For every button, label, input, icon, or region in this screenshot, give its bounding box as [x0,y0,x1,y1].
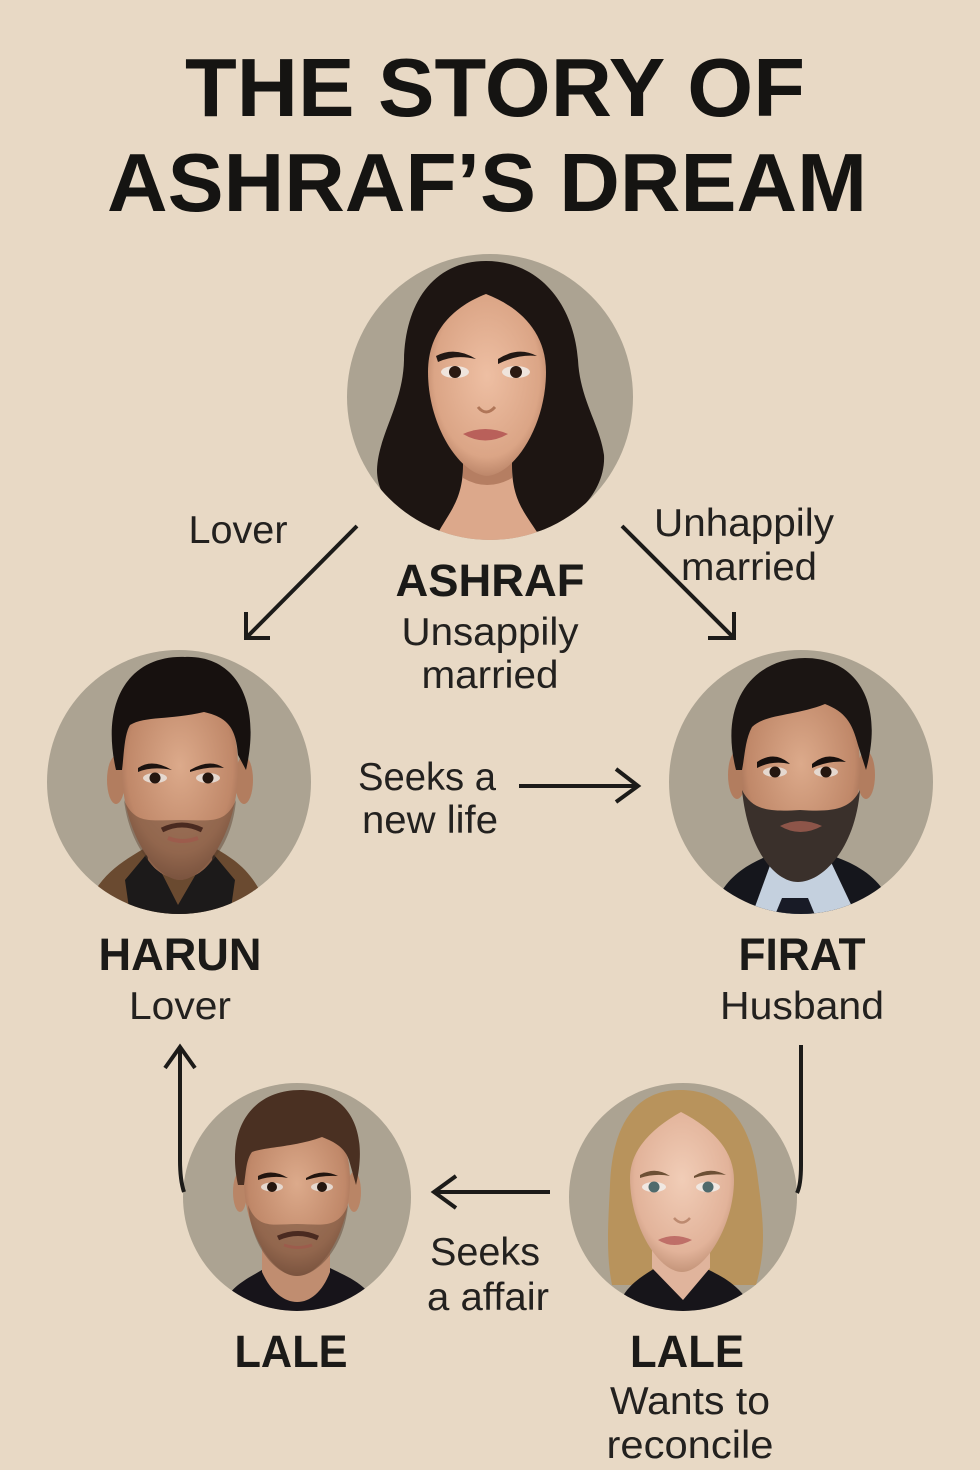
label: Unhappily married [654,502,835,589]
caption: Firat [720,929,884,1028]
arrow: Ashraf to Firat [622,526,734,638]
label: Unhappily married: married [681,546,817,589]
arrow: Firat to Lale [797,1045,801,1193]
label: Unhappily married: Unhappily [654,502,835,545]
title: ASHRAF’S DREAM [107,136,867,229]
caption: Firat: FIRAT [738,929,866,980]
caption: Lale (female) [606,1326,774,1467]
arrow: Ashraf to Harun [246,526,357,638]
caption: Ashraf: married [422,654,558,697]
caption: Firat: Husband [720,985,884,1028]
portrait: Harun [45,648,315,918]
label: Seeks a affair: a affair [427,1276,549,1319]
caption: Harun: HARUN [98,929,262,980]
label: Seeks a affair [427,1231,549,1319]
portrait: Ashraf [340,250,640,545]
label: Seeks a new life: Seeks a [358,756,496,799]
title [107,41,867,229]
caption: Lale (female): Wants to [610,1380,770,1423]
portrait: Firat [665,648,935,918]
portrait: Lale (male) [180,1080,415,1315]
caption: Harun: Lover [129,985,231,1028]
arrow: Lale to Harun [165,1047,195,1192]
label: Seeks a new life: new life [362,799,498,842]
arrow: Seeks a new life [519,769,638,802]
caption: Ashraf: Unsappily [402,611,579,654]
caption: Harun [98,929,262,1028]
label: Lover: Lover [188,509,288,552]
caption: Lale (female): reconcile [606,1424,774,1467]
caption: Ashraf: ASHRAF [396,555,584,606]
caption: Ashraf [396,555,584,697]
label: Seeks a new life [358,756,498,842]
title: THE STORY OF [185,41,805,134]
portrait: Lale (female) [565,1080,800,1315]
label: Seeks a affair: Seeks [430,1231,540,1274]
caption: Lale (male): LALE [234,1326,348,1377]
arrow: Seeks a affair [434,1176,550,1208]
caption: Lale (female): LALE [630,1326,744,1377]
